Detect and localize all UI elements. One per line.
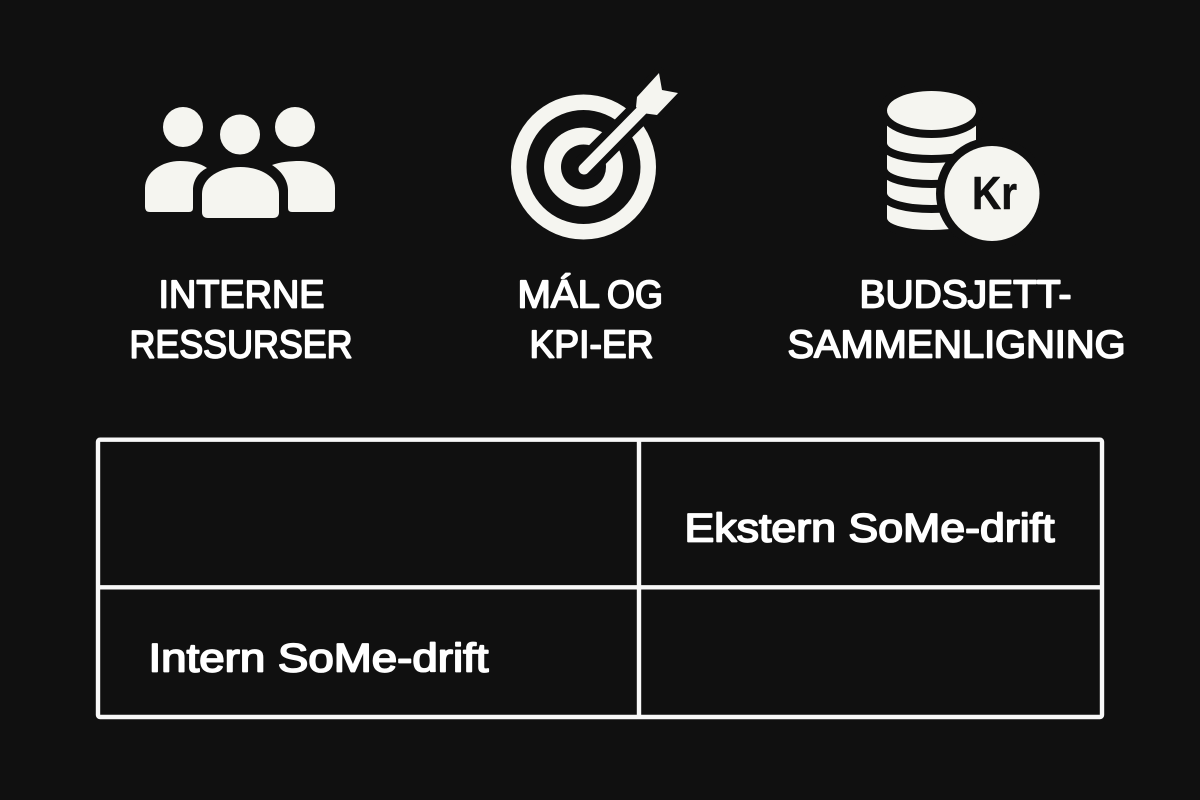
heading: mål og KPI-er: OG xyxy=(607,274,663,316)
heading: budsjett-sammenligning xyxy=(788,274,1126,366)
comparison table xyxy=(98,440,1102,717)
table cell: ekstern SoMe-drift: Ekstern SoMe-drift xyxy=(684,506,1055,550)
icon: coin stack with Kr coin xyxy=(887,91,1048,250)
heading: interne ressurser: RESSURSER xyxy=(130,324,352,366)
heading: budsjett-sammenligning: BUDSJETT- xyxy=(860,274,1072,316)
icon: group of three people xyxy=(145,107,335,218)
heading: budsjett-sammenligning: SAMMENLIGNING xyxy=(788,324,1126,366)
table cell: intern SoMe-drift: Intern SoMe-drift xyxy=(148,636,489,680)
panel: mål og KPI-er xyxy=(511,73,678,366)
icon: target with arrow xyxy=(511,73,678,240)
panel: budsjett-sammenligning xyxy=(788,91,1126,366)
heading: interne ressurser: INTERNE xyxy=(158,274,324,316)
panel: interne ressurser xyxy=(130,107,352,366)
heading: mål og KPI-er: MÁL xyxy=(518,274,600,316)
heading: mål og KPI-er: KPI-ER xyxy=(530,324,654,366)
heading: interne ressurser xyxy=(130,274,352,366)
icon: coin stack with Kr coin: Kr xyxy=(972,167,1017,219)
